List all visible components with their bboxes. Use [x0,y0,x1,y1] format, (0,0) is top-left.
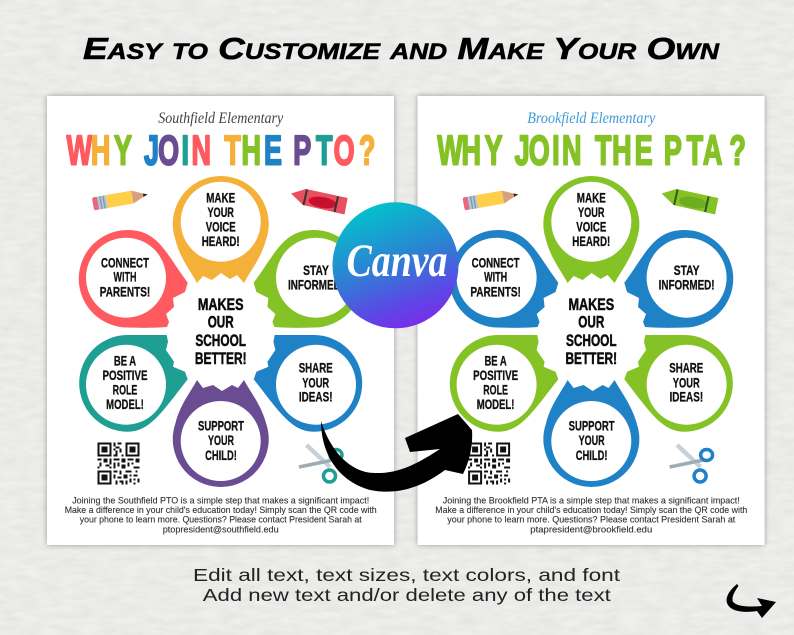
petal: stay informed: INFORMED! [288,277,344,292]
flyer body text: Make a difference in your child's education today! Simply scan the QR code with [65,504,377,515]
icon: red crayon [291,189,348,214]
petal: make your voice heard: HEARD! [572,234,610,249]
center message [565,296,617,368]
petal: connect with parents [449,230,558,328]
petal: make your voice heard [173,176,269,283]
petal: make your voice heard: MAKE [577,191,606,206]
center message: SCHOOL [566,332,617,350]
petal: be a positive role model: BE A [114,353,136,368]
school name: Southfield Elementary [158,110,283,127]
flyer body text: your phone to learn more. Questions? Please contact President Sarah at [447,514,736,525]
petal: be a positive role model: ROLE [483,383,508,398]
QR code [468,442,510,484]
petal: share your ideas: YOUR [302,375,329,390]
petal: connect with parents: PARENTS! [100,285,150,300]
icon: scissors [299,445,342,482]
flyer body text [435,494,747,534]
petal: stay informed: INFORMED! [659,277,715,292]
petal: be a positive role model [450,335,558,432]
petal: be a positive role model: BE A [484,353,507,368]
petal: support your child: SUPPORT [569,419,615,434]
petal: make your voice heard: VOICE [206,220,236,235]
petal: connect with parents: CONNECT [472,256,520,271]
flyer body text: your phone to learn more. Questions? Please contact President Sarah at [80,514,362,525]
school name: Brookfield Elementary [527,110,655,127]
center message: OUR [208,314,234,332]
petal: connect with parents: WITH [484,270,507,285]
petal: support your child: CHILD! [205,448,237,463]
arrow: next-page corner arrow [727,584,776,618]
petal: make your voice heard: MAKE [206,191,235,206]
flyer body text: Joining the Southfield PTO is a simple step that makes a significant impact! [72,494,369,506]
petal: share your ideas: YOUR [673,375,700,390]
petal: share your ideas: IDEAS! [299,390,333,405]
petal: make your voice heard: YOUR [207,205,234,220]
petal: support your child: SUPPORT [198,419,245,434]
petal: support your child: YOUR [208,433,234,448]
petal: connect with parents [79,230,188,328]
panel: Brookfield PTA flyer [418,96,765,545]
heading: Easy to Customize and Make Your Own [83,31,720,66]
petal: be a positive role model: POSITIVE [102,368,148,383]
petal: support your child: YOUR [579,433,605,448]
petal: support your child [543,380,639,487]
petal: stay informed [624,230,733,328]
icon: pencil [462,188,519,210]
footer text: Edit all text, text sizes, text colors, and font [193,565,620,585]
petal: make your voice heard: VOICE [576,220,606,235]
petal: make your voice heard [543,176,639,283]
petal: support your child: CHILD! [576,448,607,463]
footer text [193,565,620,605]
petal: be a positive role model: ROLE [113,383,137,398]
petal: connect with parents: CONNECT [101,256,150,271]
footer text: Add new text and/or delete any of the text [203,585,611,605]
flyer body text: ptopresident@southfield.edu [163,524,279,534]
petal: make your voice heard: YOUR [578,205,605,220]
icon: scissors [670,445,713,482]
petal: connect with parents: WITH [114,270,136,285]
petal: share your ideas [254,335,362,432]
QR code [98,442,140,484]
petal: share your ideas: SHARE [669,361,703,376]
center message: MAKES [198,296,244,314]
center message: BETTER! [565,350,617,368]
flyer body text [65,494,377,534]
petal: support your child [173,380,269,487]
flyer title: WHY JOIN THE PTO? [67,128,375,174]
petal: be a positive role model: MODEL! [106,397,144,412]
center message: BETTER! [195,350,247,368]
flyer body text: Joining the Brookfield PTA is a simple step that makes a significant impact! [443,494,740,506]
petal: stay informed [254,230,363,328]
flyer body text: Make a difference in your child's education today! Simply scan the QR code with [435,504,747,515]
Canva badge [332,202,458,328]
Canva badge: Canva [346,235,448,287]
icon: pencil [92,188,149,210]
center message: MAKES [568,296,614,314]
petal: share your ideas: SHARE [299,361,333,376]
icon: green crayon [662,189,718,214]
flyer title: WHY JOIN THE PTA? [437,128,746,174]
petal: share your ideas: IDEAS! [669,390,703,405]
center message: OUR [578,314,604,332]
petal: stay informed: STAY [303,263,329,278]
petal: be a positive role model [79,335,188,432]
petal: connect with parents: PARENTS! [470,285,521,300]
petal: share your ideas [624,335,733,432]
petal: make your voice heard: HEARD! [202,234,240,249]
petal: be a positive role model: POSITIVE [473,368,518,383]
arrow: curved black arrow between flyers [321,414,472,492]
center message [195,296,247,368]
petal: be a positive role model: MODEL! [477,397,514,412]
petal: stay informed: STAY [674,263,699,278]
center message: SCHOOL [195,332,246,350]
flyer body text: ptapresident@brookfield.edu [530,524,652,534]
panel: Southfield PTO flyer [47,96,394,545]
